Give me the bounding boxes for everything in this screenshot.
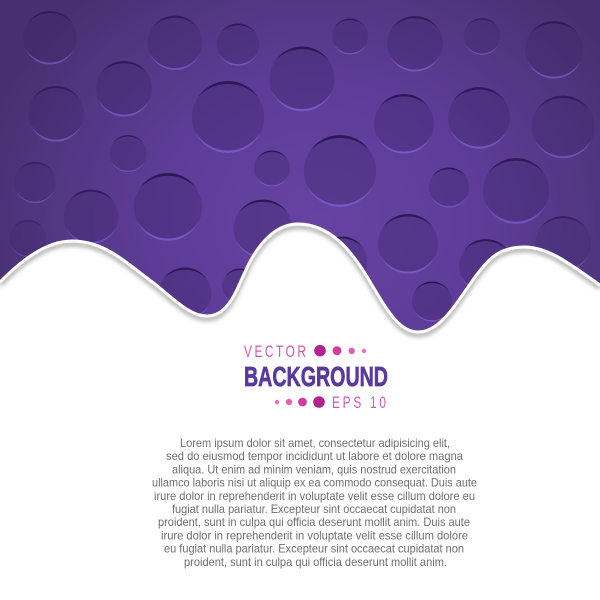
- label: EPS 10: EPS 10: [332, 394, 386, 413]
- body paragraph: ullamco laboris nisi ut aliquip ex ea commodo consequat. Duis aute: [152, 477, 477, 490]
- body paragraph: fugiat nulla pariatur. Excepteur sint occaecat cupidatat non: [172, 503, 456, 516]
- heading: BACKGROUND: BACKGROUND: [244, 361, 388, 392]
- dots row: top: [314, 345, 366, 357]
- body paragraph: irure dolor in reprehenderit in voluptate velit esse cillum dolore: [161, 529, 468, 542]
- perforated circles pattern: [9, 11, 594, 322]
- dots row: bottom: [275, 396, 325, 408]
- body paragraph: eu fugiat nulla pariatur. Excepteur sint occaecat cupidatat non: [164, 543, 464, 556]
- body paragraph: sed do eiusmod tempor incididunt ut labore et dolore magna: [166, 450, 464, 463]
- body paragraph: proident, sunt in culpa qui officia deserunt mollit anim. Duis aute: [158, 516, 470, 529]
- purple background panel: [0, 0, 600, 340]
- body paragraph: irure dolor in reprehenderit in voluptate velit esse cillum dolore eu: [154, 490, 475, 503]
- heading: VECTOR: VECTOR: [244, 343, 306, 362]
- body paragraph: aliqua. Ut enim ad minim veniam, quis nostrud exercitation: [172, 463, 456, 476]
- body paragraph: proident, sunt in culpa qui officia deserunt mollit anim.: [184, 556, 447, 569]
- body paragraph: Lorem ipsum dolor sit amet, consectetur adipisicing elit,: [180, 437, 450, 450]
- white wave panel: [0, 222, 600, 340]
- body paragraph: [152, 437, 477, 569]
